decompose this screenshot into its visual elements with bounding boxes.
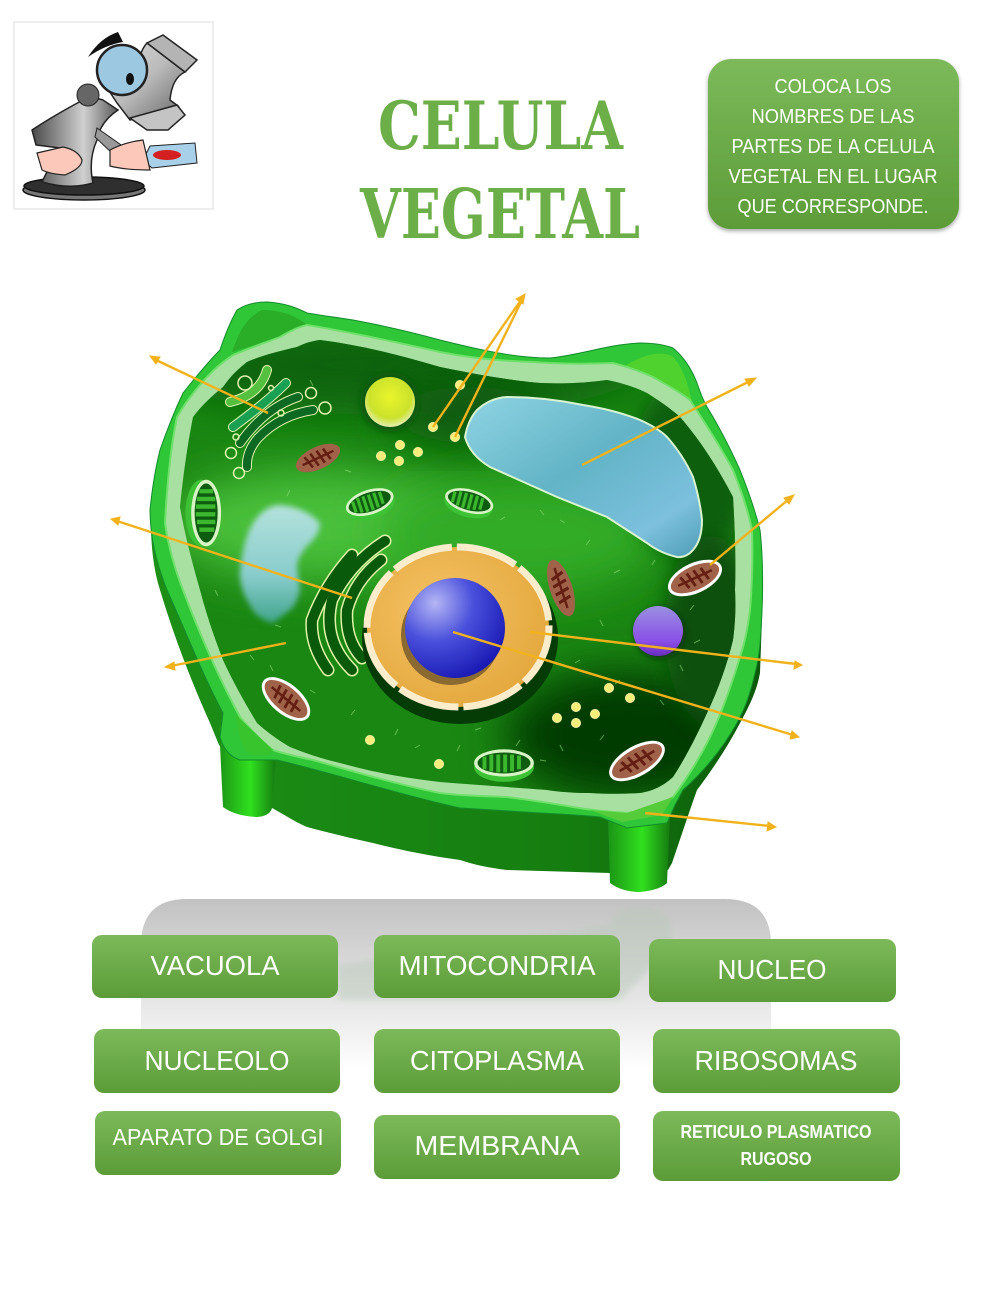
title: VEGETAL bbox=[359, 175, 640, 255]
icon: magnifier eye bbox=[97, 45, 147, 95]
button: ribosomas bbox=[653, 1029, 900, 1093]
arrow: nucleus bbox=[530, 632, 802, 669]
icon: slide bbox=[143, 143, 197, 168]
nuclear envelope bbox=[367, 547, 549, 707]
icon: microscope arm bbox=[32, 98, 118, 186]
corner pad: bottom left bbox=[236, 715, 273, 755]
button: membrana bbox=[374, 1115, 620, 1179]
title bbox=[359, 87, 640, 255]
corner pad: top left bbox=[232, 310, 307, 352]
icon: left hand bbox=[37, 147, 82, 175]
corner pad: bottom right bbox=[590, 797, 673, 822]
instruction box: VEGETAL EN EL LUGAR bbox=[728, 166, 938, 188]
label buttons bbox=[92, 935, 900, 1181]
arrow: membrane bbox=[645, 813, 776, 831]
arrow: ribosome one bbox=[433, 294, 525, 427]
icon: microscope base bbox=[23, 177, 145, 200]
arrow: golgi bbox=[150, 356, 268, 413]
icon: objective lens bbox=[130, 105, 185, 130]
golgi apparatus bbox=[226, 370, 331, 478]
button: aparato de golgi: APARATO DE GOLGI bbox=[112, 1124, 324, 1150]
button: reticulo plasmatico rugoso: RUGOSO bbox=[740, 1149, 812, 1169]
arrow: vacuole bbox=[582, 378, 756, 465]
nucleus bbox=[362, 547, 558, 724]
cytoplasm bbox=[180, 340, 736, 794]
button: mitocondria bbox=[374, 935, 620, 998]
button: reticulo plasmatico rugoso bbox=[653, 1111, 900, 1181]
button: membrana: MEMBRANA bbox=[414, 1130, 580, 1161]
button: nucleo bbox=[649, 939, 896, 1002]
right pillar bbox=[608, 815, 670, 892]
button: vacuola bbox=[92, 935, 338, 998]
icon: knob bbox=[77, 84, 99, 106]
purple vesicle bbox=[633, 606, 686, 659]
nucleus shadow bbox=[362, 552, 558, 724]
cell lower body bbox=[151, 530, 763, 873]
corner pad: top right bbox=[625, 354, 692, 402]
arrow: ribosome two bbox=[455, 300, 522, 437]
icon: microscope head bbox=[102, 43, 185, 120]
icon: microscope rear arm bbox=[95, 128, 124, 154]
rough endoplasmic reticulum bbox=[312, 541, 385, 670]
microscope illustration bbox=[14, 22, 213, 209]
button: vacuola: VACUOLA bbox=[150, 950, 280, 981]
pale band bbox=[165, 325, 752, 813]
cell wall outer band bbox=[150, 302, 763, 828]
mitochondria bbox=[254, 438, 728, 789]
icon: eyepiece cap bbox=[147, 35, 197, 72]
instruction box bbox=[708, 59, 959, 229]
lime vesicle bbox=[360, 372, 420, 432]
button: nucleolo bbox=[94, 1029, 340, 1093]
reflection panel bbox=[141, 899, 771, 1070]
chloroplasts bbox=[185, 480, 534, 782]
instruction box: COLOCA LOS bbox=[774, 76, 892, 98]
small vacuole bbox=[240, 505, 320, 623]
icon: eyebrow bbox=[88, 32, 123, 57]
instruction box: QUE CORRESPONDE. bbox=[738, 196, 928, 218]
instruction box: NOMBRES DE LAS bbox=[752, 106, 914, 128]
button: aparato de golgi bbox=[95, 1111, 341, 1175]
button: citoplasma: CITOPLASMA bbox=[410, 1045, 584, 1076]
button: ribosomas: RIBOSOMAS bbox=[694, 1045, 858, 1076]
arrow: nucleolus bbox=[453, 632, 799, 739]
button: nucleolo: NUCLEOLO bbox=[144, 1045, 290, 1076]
plant cell diagram bbox=[150, 302, 763, 892]
icon: right hand bbox=[110, 140, 150, 170]
nucleolus bbox=[405, 578, 505, 678]
cytoplasm speckles bbox=[215, 380, 700, 761]
title: CELULA bbox=[378, 87, 624, 165]
arrow: mitochondrion bbox=[710, 495, 794, 565]
ribosomes bbox=[366, 380, 634, 768]
button: mitocondria: MITOCONDRIA bbox=[398, 950, 596, 981]
button: nucleo: NUCLEO bbox=[718, 954, 826, 985]
button: reticulo plasmatico rugoso: RETICULO PLASMATICO bbox=[680, 1122, 872, 1142]
nucleolus shadow bbox=[401, 585, 501, 685]
pointer arrows bbox=[111, 294, 802, 831]
instruction box: PARTES DE LA CELULA bbox=[732, 136, 935, 158]
arrow: cytoplasm bbox=[165, 643, 286, 670]
arrow: reticulum bbox=[111, 517, 352, 598]
left pillar bbox=[219, 725, 276, 817]
large vacuole bbox=[465, 397, 702, 557]
button: citoplasma bbox=[374, 1029, 620, 1093]
